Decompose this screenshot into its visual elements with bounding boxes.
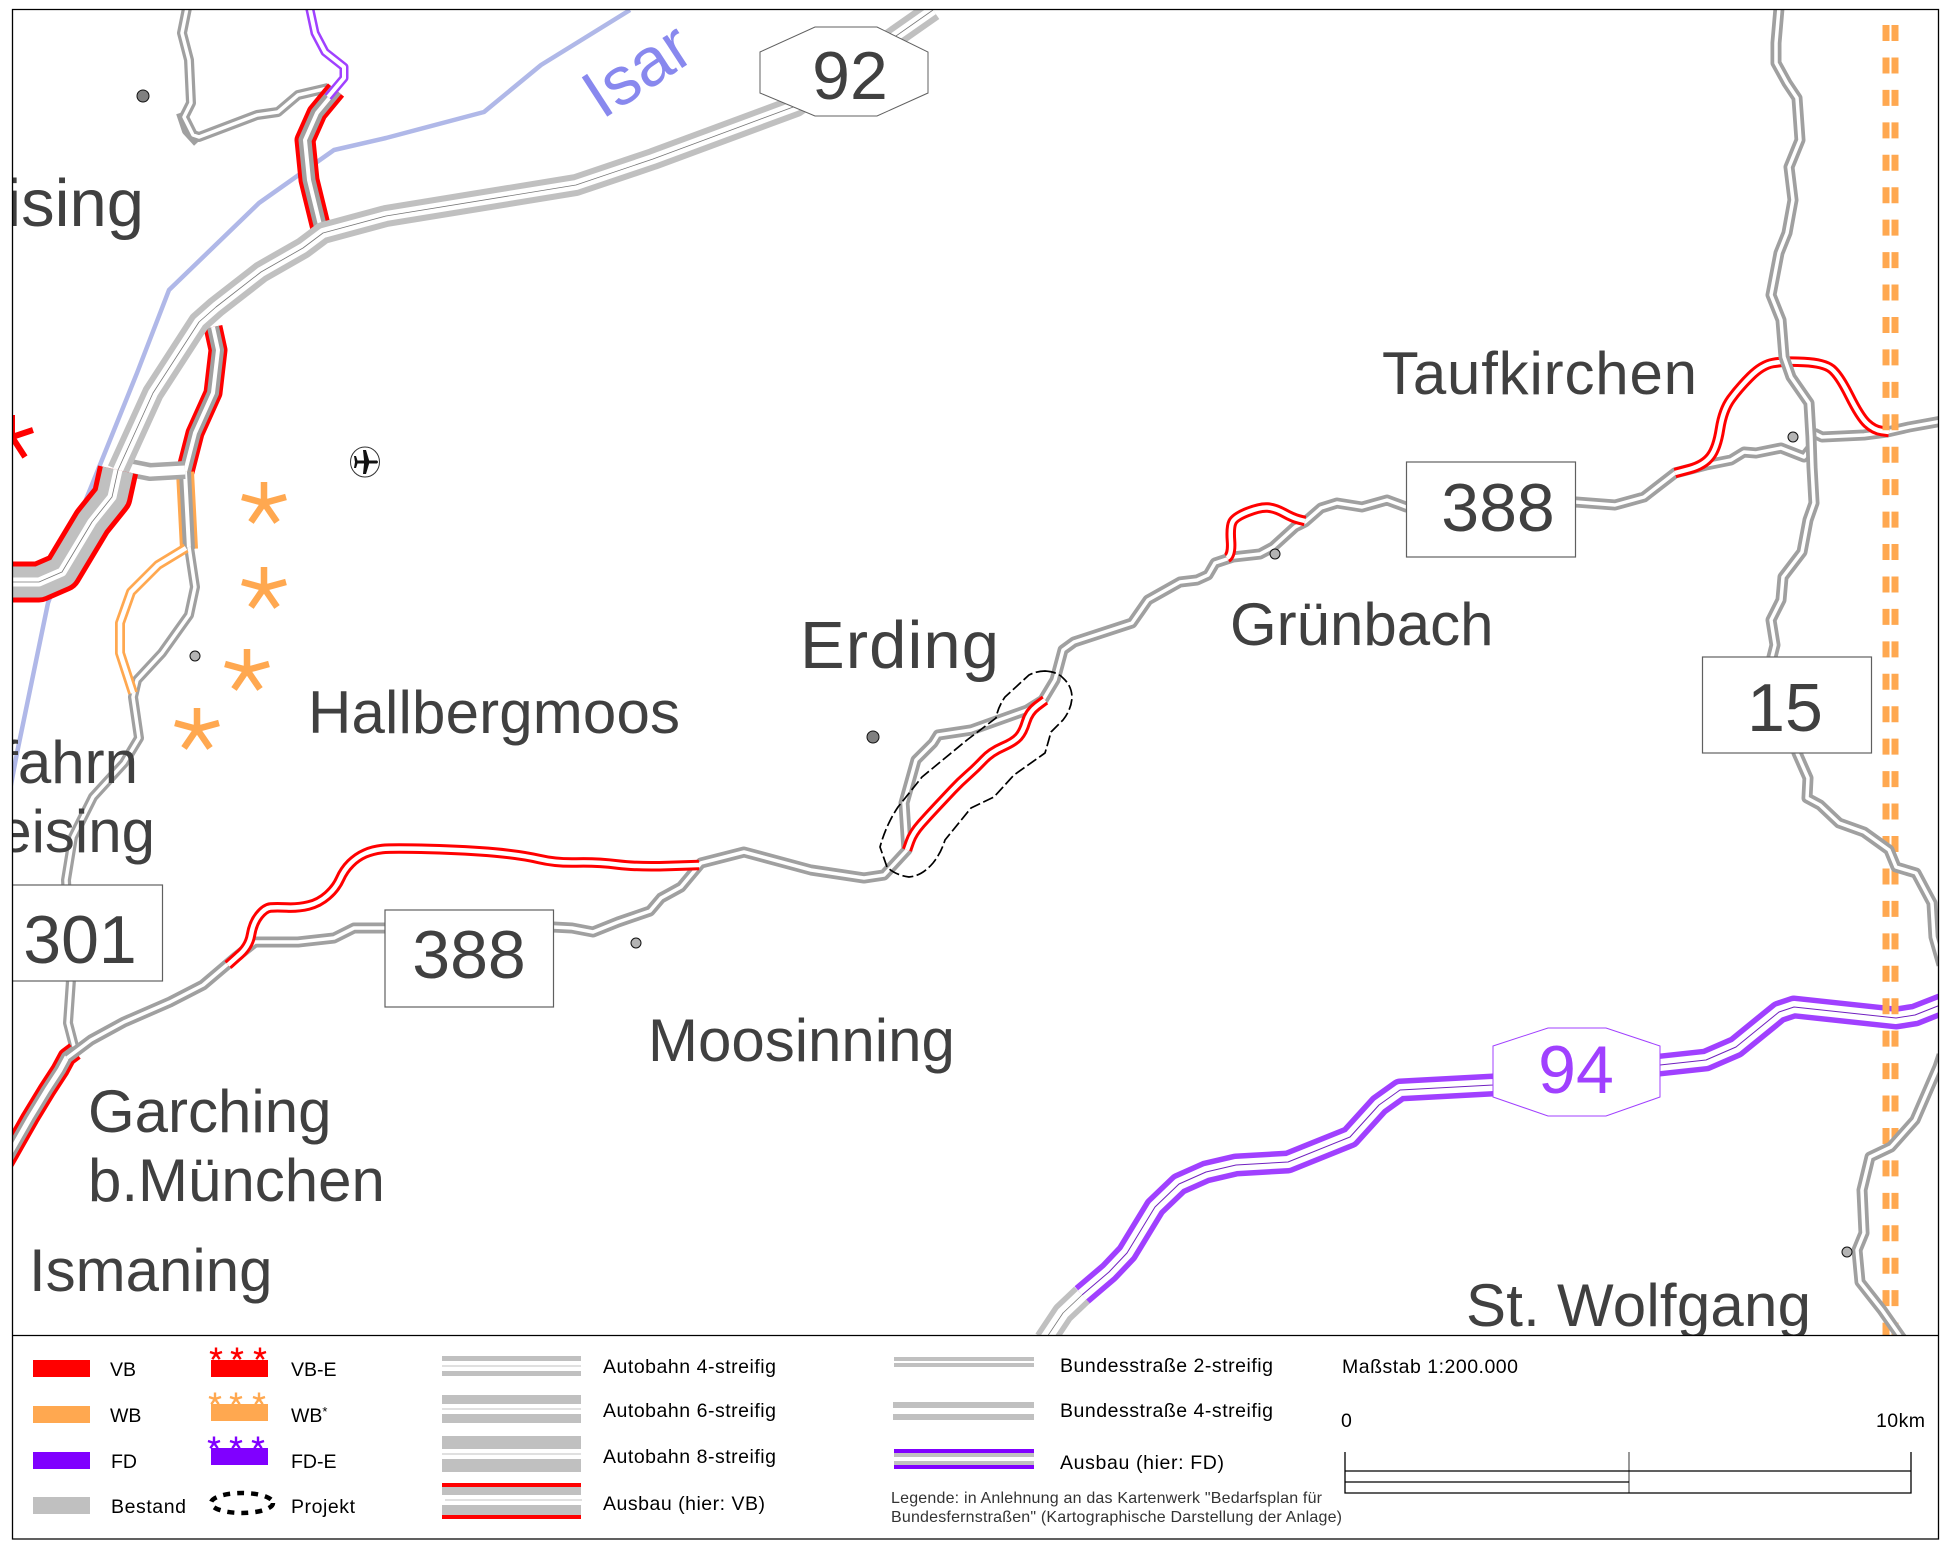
legend: Bundesstraße 2-streifig: Bundesstraße 2-streifig <box>1060 1355 1273 1377</box>
road: A92 autobahn <box>118 10 933 470</box>
road: airport spur, Ausbau WB <box>185 472 189 549</box>
river label Isar: Isar <box>569 7 705 133</box>
legend note: Legende: in Anlehnung an das Kartenwerk "Bedarfsplan für <box>891 1490 1323 1507</box>
legend: Autobahn 8-streifig: Autobahn 8-streifig <box>603 1446 776 1468</box>
road: connector to autobahn <box>130 468 185 472</box>
legend: WB <box>33 1405 141 1427</box>
place label: Taufkirchen: Taufkirchen <box>1382 340 1697 407</box>
legend: VB <box>33 1359 136 1381</box>
legend: Autobahn 8-streifig <box>442 1436 776 1472</box>
place label: St. Wolfgang: St. Wolfgang <box>1466 1272 1811 1339</box>
legend: Bundesstraße 4-streifig: Bundesstraße 4-streifig <box>1060 1400 1273 1422</box>
road shield: B15: 15 <box>1747 670 1823 746</box>
settlement dot: Erding <box>867 731 879 743</box>
legend: FD <box>33 1451 137 1473</box>
place label: Ismaning: Ismaning <box>29 1237 272 1304</box>
road: north spur, Ausbau VB <box>305 90 336 229</box>
legend: Bundesstraße 2-streifig <box>894 1355 1273 1377</box>
legend: Ausbau VB: Ausbau (hier: VB) <box>603 1493 765 1515</box>
road shield: B301: 301 <box>23 902 137 978</box>
scale bar <box>1341 1410 1925 1493</box>
legend: Bundesstraße 4-streifig <box>893 1400 1273 1422</box>
road: B388 east arm <box>1814 421 1942 437</box>
star: orange WB 1 <box>242 482 286 522</box>
road: A94 existing <box>1045 1295 1082 1340</box>
settlement dot: Grünbach <box>1270 549 1280 559</box>
road shield: B301 <box>8 885 162 981</box>
legend: VB: VB <box>110 1359 136 1381</box>
legend: Projekt <box>211 1493 356 1518</box>
road: B388 main line <box>67 447 1812 1058</box>
legend: WB star: * <box>322 1404 327 1419</box>
legend: Bestand: Bestand <box>111 1496 186 1518</box>
legend note: Bundesfernstraßen" (Kartographische Darstellung der Anlage) <box>891 1509 1342 1526</box>
legend: WB: WB <box>110 1405 141 1427</box>
road: red western bypass <box>228 848 699 965</box>
road: purple FD segment <box>309 5 344 97</box>
road: red Grünbach bypass <box>1227 507 1305 558</box>
project outline dashed <box>880 671 1072 877</box>
place label: Garching: Garching <box>88 1078 331 1145</box>
settlement dot: Hallbergmoos <box>190 651 200 661</box>
river Isar <box>10 10 630 790</box>
legend: VB-E: VB-E <box>291 1359 337 1381</box>
scale bar: 10km <box>1876 1410 1925 1432</box>
road shield: A94: 94 <box>1538 1032 1614 1108</box>
place label: Moosinning: Moosinning <box>648 1007 955 1074</box>
place label: Grünbach: Grünbach <box>1230 591 1494 658</box>
settlement dot: Taufkirchen <box>1788 432 1798 442</box>
road: northwest B road <box>180 8 328 143</box>
place label: Hallbergmoos: Hallbergmoos <box>308 679 680 746</box>
star: orange WB 4 <box>175 708 219 748</box>
road shield: B388 east <box>1406 462 1576 557</box>
settlement dot: St. Wolfgang <box>1842 1247 1852 1257</box>
road: western B road <box>66 547 195 1050</box>
road: autobahn 8-lane Ausbau VB <box>5 470 118 582</box>
road shield: B388 east: 388 <box>1441 470 1555 546</box>
legend: FD-E <box>208 1436 336 1473</box>
road shield: B388 west <box>385 910 554 1007</box>
border dashes: WB east line <box>1886 25 1895 1345</box>
legend: Autobahn 4-streifig <box>442 1356 776 1378</box>
scale title: Maßstab 1:200.000 <box>1342 1356 1518 1378</box>
road shield: A94 <box>1493 1028 1660 1116</box>
legend: FD-E: FD-E <box>291 1451 336 1473</box>
star: orange WB 2 <box>242 567 286 607</box>
legend: Ausbau FD <box>894 1449 1224 1474</box>
legend: Autobahn 6-streifig <box>442 1395 776 1423</box>
road: airport spur, Ausbau VB <box>185 327 218 472</box>
legend: VB-E <box>210 1348 337 1381</box>
road shield: B15 <box>1702 657 1872 753</box>
legend: FD: FD <box>111 1451 137 1473</box>
road shield: A92 <box>760 27 928 116</box>
legend: Projekt: Projekt <box>291 1496 356 1518</box>
legend: Autobahn 6-streifig: Autobahn 6-streifig <box>603 1400 776 1422</box>
icon: airport <box>350 447 380 477</box>
star: red VB-E <box>13 415 34 459</box>
road shield: B388 west: 388 <box>412 917 526 993</box>
star: orange WB 3 <box>225 649 269 689</box>
legend note <box>891 1490 1342 1526</box>
legend: Ausbau VB <box>442 1483 765 1519</box>
place label: b.München: b.München <box>88 1147 385 1214</box>
legend: WB star <box>209 1392 327 1427</box>
scale bar: 0 <box>1341 1410 1352 1432</box>
place label: Erding: Erding <box>800 608 999 683</box>
road: A94 Ausbau FD <box>1082 1002 1948 1295</box>
road: eastern north-south B road <box>1771 8 1942 965</box>
panel: legend <box>12 1335 1938 1539</box>
road: alternative WB <box>120 548 186 693</box>
legend: Bestand <box>33 1496 186 1518</box>
settlement dot: Freising area <box>137 90 149 102</box>
legend: Ausbau FD: Ausbau (hier: FD) <box>1060 1452 1224 1474</box>
legend: Autobahn 4-streifig: Autobahn 4-streifig <box>603 1356 776 1378</box>
road shield: A92: 92 <box>812 38 888 114</box>
settlement dot: Moosinning <box>631 938 641 948</box>
road: red Taufkirchen bypass <box>1675 362 1889 473</box>
road: Garching Ausbau VB <box>5 1051 75 1162</box>
legend: WB star: WB <box>291 1405 322 1427</box>
road: red Erding project section <box>907 700 1045 850</box>
road: southeast B road <box>1857 1055 1942 1340</box>
